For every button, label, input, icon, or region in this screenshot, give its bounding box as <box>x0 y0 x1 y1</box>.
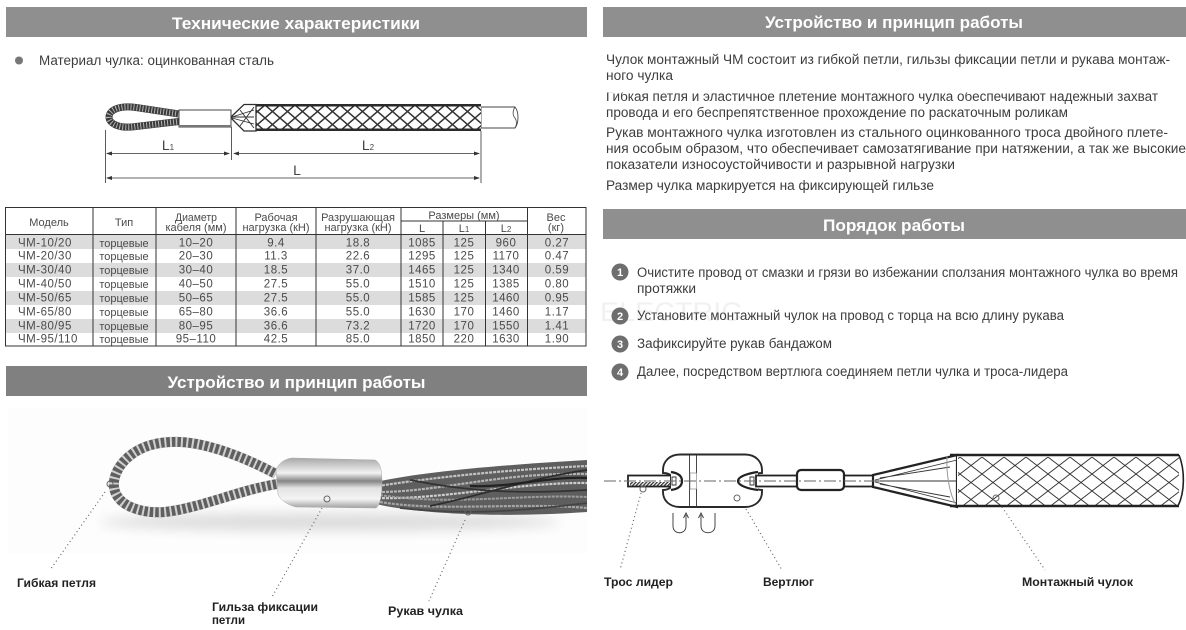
table rows: торцевые <box>99 334 149 346</box>
table rows: торцевые <box>99 251 149 263</box>
dimension drawing of the stocking: L2 <box>362 137 375 153</box>
table rows: ЧМ-30/40 <box>18 264 72 276</box>
table rows: ЧМ-65/80 <box>18 306 72 318</box>
step 2: 2 <box>617 311 623 323</box>
table rows: 40–50 <box>179 278 213 290</box>
table rows: 1085 <box>408 238 436 250</box>
flexible loop <box>114 442 277 512</box>
table rows: 73.2 <box>346 320 370 332</box>
table rows: 125 <box>454 292 474 304</box>
dimension labels: L1 <box>162 137 175 153</box>
cone <box>873 455 957 507</box>
table grid <box>6 208 586 346</box>
dimension drawing of the stocking: L <box>293 162 301 178</box>
table rows <box>18 238 569 346</box>
text block: description: Чулок монтажный ЧМ состоит из гибкой петли, гильзы фиксации петли и рукава монтаж- <box>606 52 1170 67</box>
table header: Модель <box>29 217 69 229</box>
table rows: 0.27 <box>545 238 569 250</box>
table rows: 27.5 <box>264 292 288 304</box>
braided rope sleeve <box>376 460 587 515</box>
step 1: Очистите провод от смазки и грязи во избежании сползания монтажного чулка во время <box>637 265 1178 280</box>
table rows: 1550 <box>492 320 520 332</box>
leader rope <box>628 476 671 486</box>
callout: flexible loop <box>17 481 113 590</box>
table rows: 220 <box>454 334 474 346</box>
table rows: 125 <box>454 250 474 262</box>
table rows: ЧМ-50/65 <box>18 292 72 304</box>
table rows: 55.0 <box>346 292 370 304</box>
table: model specifications <box>6 208 586 346</box>
table rows: 42.5 <box>264 334 288 346</box>
table rows: 0.95 <box>545 292 569 304</box>
table rows: 37.0 <box>346 264 370 276</box>
table rows: ЧМ-95/110 <box>18 334 78 346</box>
callout: swivel <box>734 495 814 589</box>
table header: L2 <box>501 223 512 235</box>
watermark: ELECTRIC <box>600 297 742 327</box>
callout: fixing sleeve: Гильза фиксации <box>212 600 318 614</box>
cable end <box>481 107 518 128</box>
table rows: 11.3 <box>264 250 288 262</box>
table rows: 20–30 <box>179 250 213 262</box>
table header: Рабочая <box>254 212 298 224</box>
table rows: 1460 <box>492 306 520 318</box>
table rows: 85.0 <box>346 334 370 346</box>
numbered steps <box>612 264 1178 380</box>
callout: swivel: Вертлюг <box>763 575 814 589</box>
table rows: 65–80 <box>179 306 213 318</box>
table rows: 36.6 <box>264 320 288 332</box>
table rows: торцевые <box>99 307 149 319</box>
text block: description: Размер чулка маркируется на фиксирующей гильзе <box>606 178 934 193</box>
table rows: 960 <box>496 238 516 250</box>
assembly drawing: leader rope, swivel, stocking <box>604 454 1183 507</box>
heading: work procedure: Порядок работы <box>823 216 965 235</box>
connecting rod and coupler <box>756 476 874 486</box>
text block: description: ного чулка <box>606 68 673 83</box>
callout: installation stocking: Монтажный чулок <box>1022 575 1134 589</box>
text block: description: Гибкая петля и эластичное плетение монтажного чулка обеспечивают надежный захват <box>606 89 1158 104</box>
text block: description: показатели износоустойчивости и разрывной нагрузки <box>606 157 955 172</box>
table rows: 27.5 <box>264 278 288 290</box>
callout: leader rope <box>604 486 673 589</box>
table rows: торцевые <box>99 238 149 250</box>
table rows: 125 <box>454 238 474 250</box>
table header <box>29 210 566 235</box>
table rows: ЧМ-20/30 <box>18 250 72 262</box>
table rows: 80–95 <box>179 320 213 332</box>
heading: design and operating principle (left): Устройство и принцип работы <box>168 373 426 392</box>
table rows: 10–20 <box>179 238 213 250</box>
table header: Размеры (мм) <box>428 210 500 222</box>
heading: design and operating principle (left) <box>6 366 587 396</box>
step 2: Установите монтажный чулок на провод с торца на всю длину рукава <box>637 308 1064 323</box>
table rows: ЧМ-10/20 <box>18 238 72 250</box>
callout: stocking sleeve <box>388 509 471 618</box>
table rows: торцевые <box>99 265 149 277</box>
icon: rotation arrows <box>673 513 715 533</box>
loop <box>109 107 179 127</box>
table header: (кг) <box>548 222 564 234</box>
callout: flexible loop: Гибкая петля <box>17 576 96 590</box>
step 4: Далее, посредством вертлюга соединяем петли чулка и троса-лидера <box>637 364 1068 379</box>
table rows: 1510 <box>408 278 436 290</box>
step 1 <box>612 264 1178 296</box>
table rows: 18.5 <box>264 264 288 276</box>
table rows: 1.17 <box>545 306 569 318</box>
bullet: material: Материал чулка: оцинкованная сталь <box>39 53 274 68</box>
table rows: 95–110 <box>176 334 216 346</box>
table rows: 1340 <box>492 264 520 276</box>
table rows: 55.0 <box>346 306 370 318</box>
table rows: ЧМ-40/50 <box>18 278 72 290</box>
table rows: торцевые <box>99 321 149 333</box>
table rows: 1385 <box>492 278 520 290</box>
table header: Разрушающая <box>321 212 395 224</box>
cone <box>232 104 256 131</box>
table rows: 1.41 <box>545 320 569 332</box>
table rows: 1465 <box>408 264 436 276</box>
table rows: 18.8 <box>346 238 370 250</box>
dimension drawing of the stocking <box>106 104 518 183</box>
table rows: 1630 <box>408 306 436 318</box>
text block: description <box>606 52 1186 193</box>
table rows: 55.0 <box>346 278 370 290</box>
text block: description: Рукав монтажного чулка изготовлен из стального оцинкованного троса двойного плете- <box>606 125 1168 140</box>
stocking tube <box>957 455 1183 506</box>
table rows: торцевые <box>99 279 149 291</box>
heading: design and operating principle (right): Устройство и принцип работы <box>765 13 1023 32</box>
table rows: 1170 <box>493 250 519 262</box>
step 3: 3 <box>617 339 623 351</box>
table rows: 125 <box>454 264 474 276</box>
soft shadow <box>100 513 560 531</box>
step 4: 4 <box>617 367 624 379</box>
table rows: торцевые <box>99 293 149 305</box>
table rows: 170 <box>454 306 474 318</box>
table rows: 1.90 <box>545 334 569 346</box>
heading: design and operating principle (right) <box>603 7 1186 37</box>
table rows: 36.6 <box>264 306 288 318</box>
step 1: 1 <box>617 267 623 279</box>
table rows: 1630 <box>492 334 520 346</box>
table header: L <box>419 223 425 235</box>
fixing sleeve <box>276 458 382 508</box>
table rows: 1460 <box>492 292 520 304</box>
table rows: 22.6 <box>346 250 370 262</box>
heading: work procedure <box>603 209 1186 239</box>
heading: technical specifications: Технические характеристики <box>172 14 420 33</box>
mesh sleeve <box>254 105 481 131</box>
photo: stocking with loop and sleeve <box>8 408 587 553</box>
heading: technical specifications <box>6 7 587 37</box>
table rows: 125 <box>454 278 474 290</box>
callout: fixing sleeve <box>212 496 330 627</box>
table header: кабеля (мм) <box>166 222 226 234</box>
table rows: 30–40 <box>179 264 213 276</box>
swivel slit <box>690 455 696 507</box>
step 3: Зафиксируйте рукав бандажом <box>637 336 832 351</box>
table rows: ЧМ-80/95 <box>18 320 72 332</box>
table rows: 0.47 <box>545 250 569 262</box>
table header: нагрузка (кН) <box>324 222 392 234</box>
callout: fixing sleeve: петли <box>212 613 245 627</box>
table rows: 0.80 <box>545 278 569 290</box>
table header: Вес <box>547 212 566 224</box>
table rows: 50–65 <box>179 292 213 304</box>
swivel eye <box>738 472 758 490</box>
centre line <box>604 480 880 482</box>
table rows: 170 <box>454 320 474 332</box>
step 1: протяжки <box>637 281 696 296</box>
table header: L1 <box>459 223 470 235</box>
text block: description: ния особым образом, что обеспечивает самозатягивание при натяжении, а так же высокие <box>606 141 1186 156</box>
table rows: 1585 <box>408 292 436 304</box>
text block: description: провода и его беспрепятственное прохождение по раскаточным роликам <box>606 105 1068 120</box>
row shading <box>6 235 586 333</box>
callout: leader rope: Трос лидер <box>604 575 673 589</box>
dimension lines <box>106 127 481 183</box>
sleeve <box>179 110 231 127</box>
table rows: 1720 <box>408 320 436 332</box>
callout: stocking sleeve: Рукав чулка <box>388 604 463 618</box>
table header: Тип <box>115 217 133 229</box>
callout: installation stocking <box>993 495 1134 589</box>
table header: Диаметр <box>175 212 217 224</box>
table rows: 0.59 <box>545 264 569 276</box>
swivel body <box>663 454 762 507</box>
table rows: 9.4 <box>267 238 285 250</box>
table header: нагрузка (кН) <box>242 222 310 234</box>
table rows: 1295 <box>408 250 436 262</box>
table rows: 1850 <box>408 334 436 346</box>
